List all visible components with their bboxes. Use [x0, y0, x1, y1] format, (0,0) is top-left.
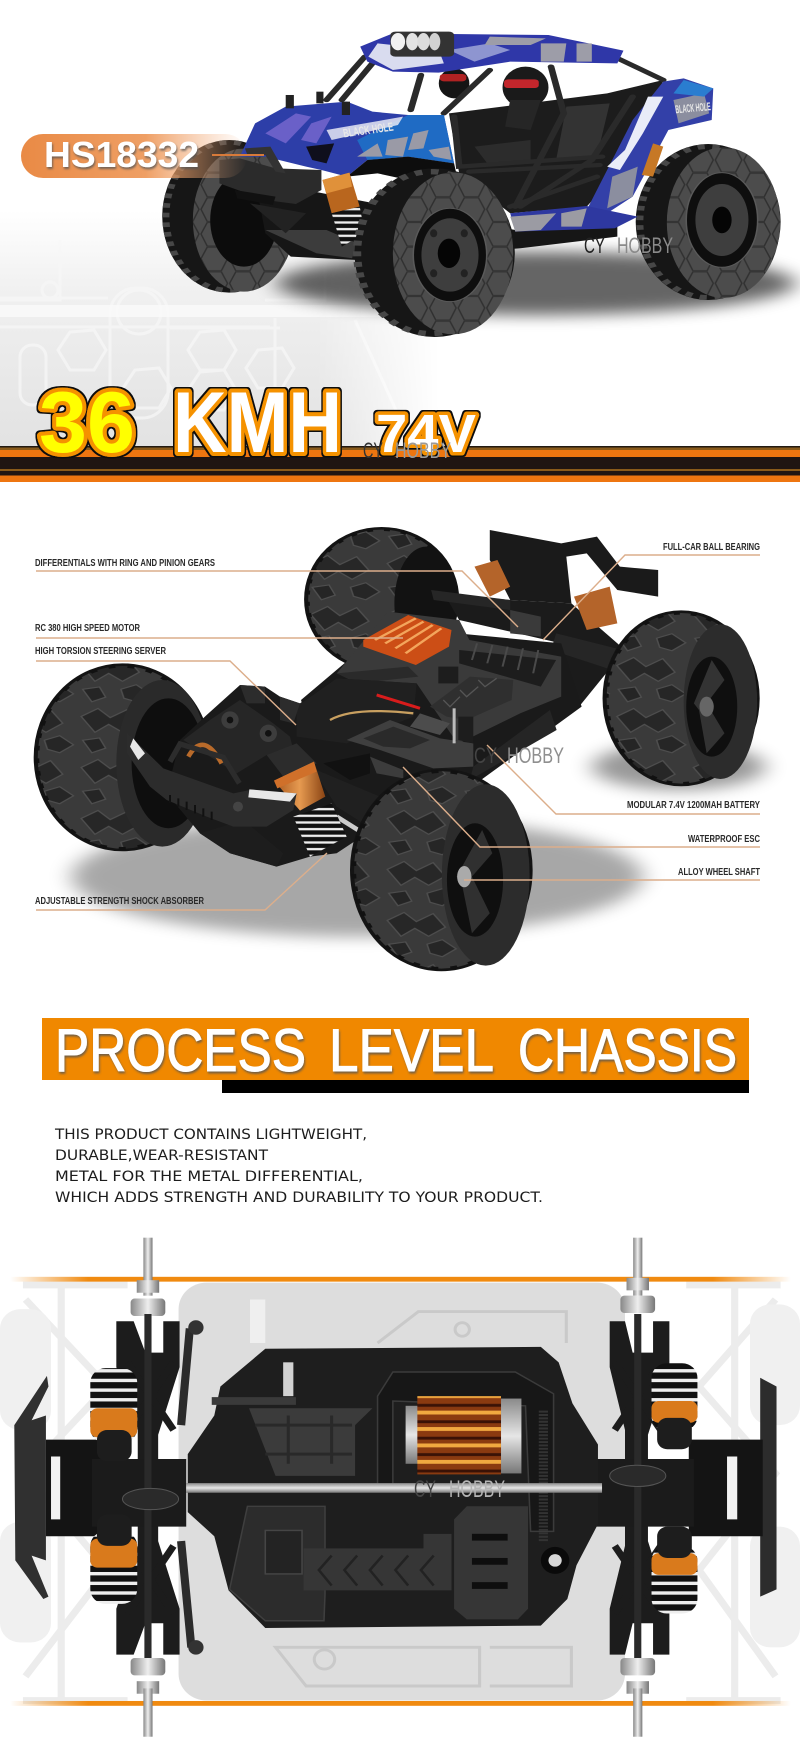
label: wheel shaft: ALLOY WHEEL SHAFT	[678, 866, 760, 878]
left bumper	[14, 1376, 117, 1599]
front coil shock	[267, 743, 347, 857]
watermark: chassis view: HOBBY	[507, 743, 564, 768]
speed stripes	[0, 446, 800, 482]
side sill	[510, 206, 638, 232]
rear suspension tower	[431, 530, 658, 707]
description text: DURABLE,WEAR-RESISTANT	[55, 1148, 268, 1164]
model number text: HS18332	[44, 134, 199, 175]
drivers helmets	[439, 67, 548, 130]
front coil shock	[322, 173, 365, 247]
description text	[54, 1127, 543, 1206]
label: steering: HIGH TORSION STEERING SERVER	[35, 645, 166, 657]
watermark: banner: CY	[363, 438, 383, 463]
chassis underside	[255, 180, 617, 260]
front left tire	[36, 665, 209, 850]
orange accent mark	[212, 154, 264, 156]
drive shaft	[186, 1483, 602, 1493]
chassis 3/4 view illustration	[36, 528, 765, 970]
watermark: car: HOBBY	[617, 233, 673, 258]
wires	[330, 711, 413, 720]
ghost side suspension	[23, 1285, 781, 1700]
front bumper	[127, 733, 297, 827]
heading text	[55, 1017, 737, 1084]
connector block	[410, 713, 450, 735]
red car photo illustration: blue off-road buggy: BLACK HOLE	[341, 121, 396, 140]
side tray	[470, 710, 557, 780]
watermark: banner	[363, 438, 451, 463]
description text: THIS PRODUCT CONTAINS LIGHTWEIGHT,	[54, 1127, 367, 1143]
rear left tire	[162, 140, 296, 293]
floor rails	[297, 678, 417, 743]
watermark: chassis view	[474, 743, 564, 768]
red car photo illustration: blue off-road buggy	[162, 32, 796, 337]
callout lines	[36, 555, 760, 910]
watermark: top-down view: HOBBY	[449, 1476, 505, 1503]
heading text: PROCESS	[55, 1017, 306, 1084]
right axle shaft	[620, 1238, 655, 1737]
watermark: chassis view: CY	[474, 743, 497, 768]
posts	[438, 667, 473, 743]
label: shock absorber: ADJUSTABLE STRENGTH SHOCK ABSORBER	[35, 895, 204, 907]
label: ball bearing: FULL-CAR BALL BEARING	[663, 541, 760, 553]
hood and front fenders	[240, 92, 459, 187]
car shadow	[276, 252, 796, 315]
heading banner	[42, 1017, 749, 1093]
watermark: top-down view: CY	[414, 1476, 436, 1503]
roof panel	[360, 32, 623, 73]
roof lights	[390, 32, 454, 57]
motor heat sink	[406, 1396, 521, 1474]
back left tire	[306, 528, 458, 670]
background: faded mechanical pattern	[0, 255, 402, 446]
central chassis tub	[188, 1347, 598, 1628]
shock absorbers	[90, 1363, 697, 1614]
main chassis tray	[301, 612, 582, 803]
steering linkage	[183, 685, 300, 773]
description text: WHICH ADDS STRENGTH AND DURABILITY TO YOUR PRODUCT.	[55, 1190, 543, 1206]
ghost chassis plate	[179, 1283, 625, 1700]
left axle shaft	[131, 1238, 165, 1737]
label: esc: WATERPROOF ESC	[688, 833, 760, 845]
rear fender	[587, 78, 713, 213]
front near tire	[355, 168, 515, 337]
heading text: CHASSIS	[518, 1017, 737, 1084]
top-down chassis illustration	[0, 1238, 800, 1737]
rear right tire	[636, 144, 781, 300]
front backing mass	[167, 678, 473, 867]
copper motor heat sink	[363, 615, 452, 665]
callout labels	[35, 541, 760, 907]
rear coil shock	[642, 143, 663, 177]
left suspension arms	[92, 1320, 204, 1655]
right bumper	[689, 1378, 777, 1597]
voltage heading: 74V	[376, 404, 476, 464]
back right tire	[605, 612, 758, 785]
silver rod	[337, 817, 363, 833]
speed heading 36: 36	[39, 375, 135, 471]
watermark: top-down view	[414, 1476, 505, 1503]
red car photo illustration: blue off-road buggy: BLACK HOLE	[674, 101, 712, 116]
battery cover	[347, 720, 473, 768]
red wire	[377, 695, 420, 708]
chevron plate	[430, 677, 513, 720]
front chassis parts	[127, 667, 557, 867]
watermark: car	[584, 233, 673, 258]
description text: METAL FOR THE METAL DIFFERENTIAL,	[55, 1169, 363, 1185]
ghost coil springs	[0, 1304, 800, 1647]
upper chassis parts	[36, 528, 758, 850]
watermark: banner: HOBBY	[395, 438, 451, 463]
label: motor: RC 380 HIGH SPEED MOTOR	[35, 622, 140, 634]
watermark: car: CY	[584, 233, 605, 258]
front bumper	[219, 147, 321, 205]
chassis shadow	[71, 743, 765, 937]
heading text: LEVEL	[329, 1017, 494, 1084]
side boxes	[317, 753, 403, 823]
heat sink fins	[375, 618, 441, 653]
roll cage and cabin	[327, 53, 663, 213]
lower skid plate	[200, 820, 283, 867]
front right tire	[352, 770, 531, 970]
model number pill	[21, 134, 247, 178]
differential gears	[122, 1465, 666, 1510]
label: differentials: DIFFERENTIALS WITH RING AND PINION GEARS	[35, 557, 215, 569]
speed heading KMH: KMH	[173, 375, 342, 471]
orange guide lines	[10, 1277, 791, 1282]
right suspension arms	[582, 1321, 694, 1655]
